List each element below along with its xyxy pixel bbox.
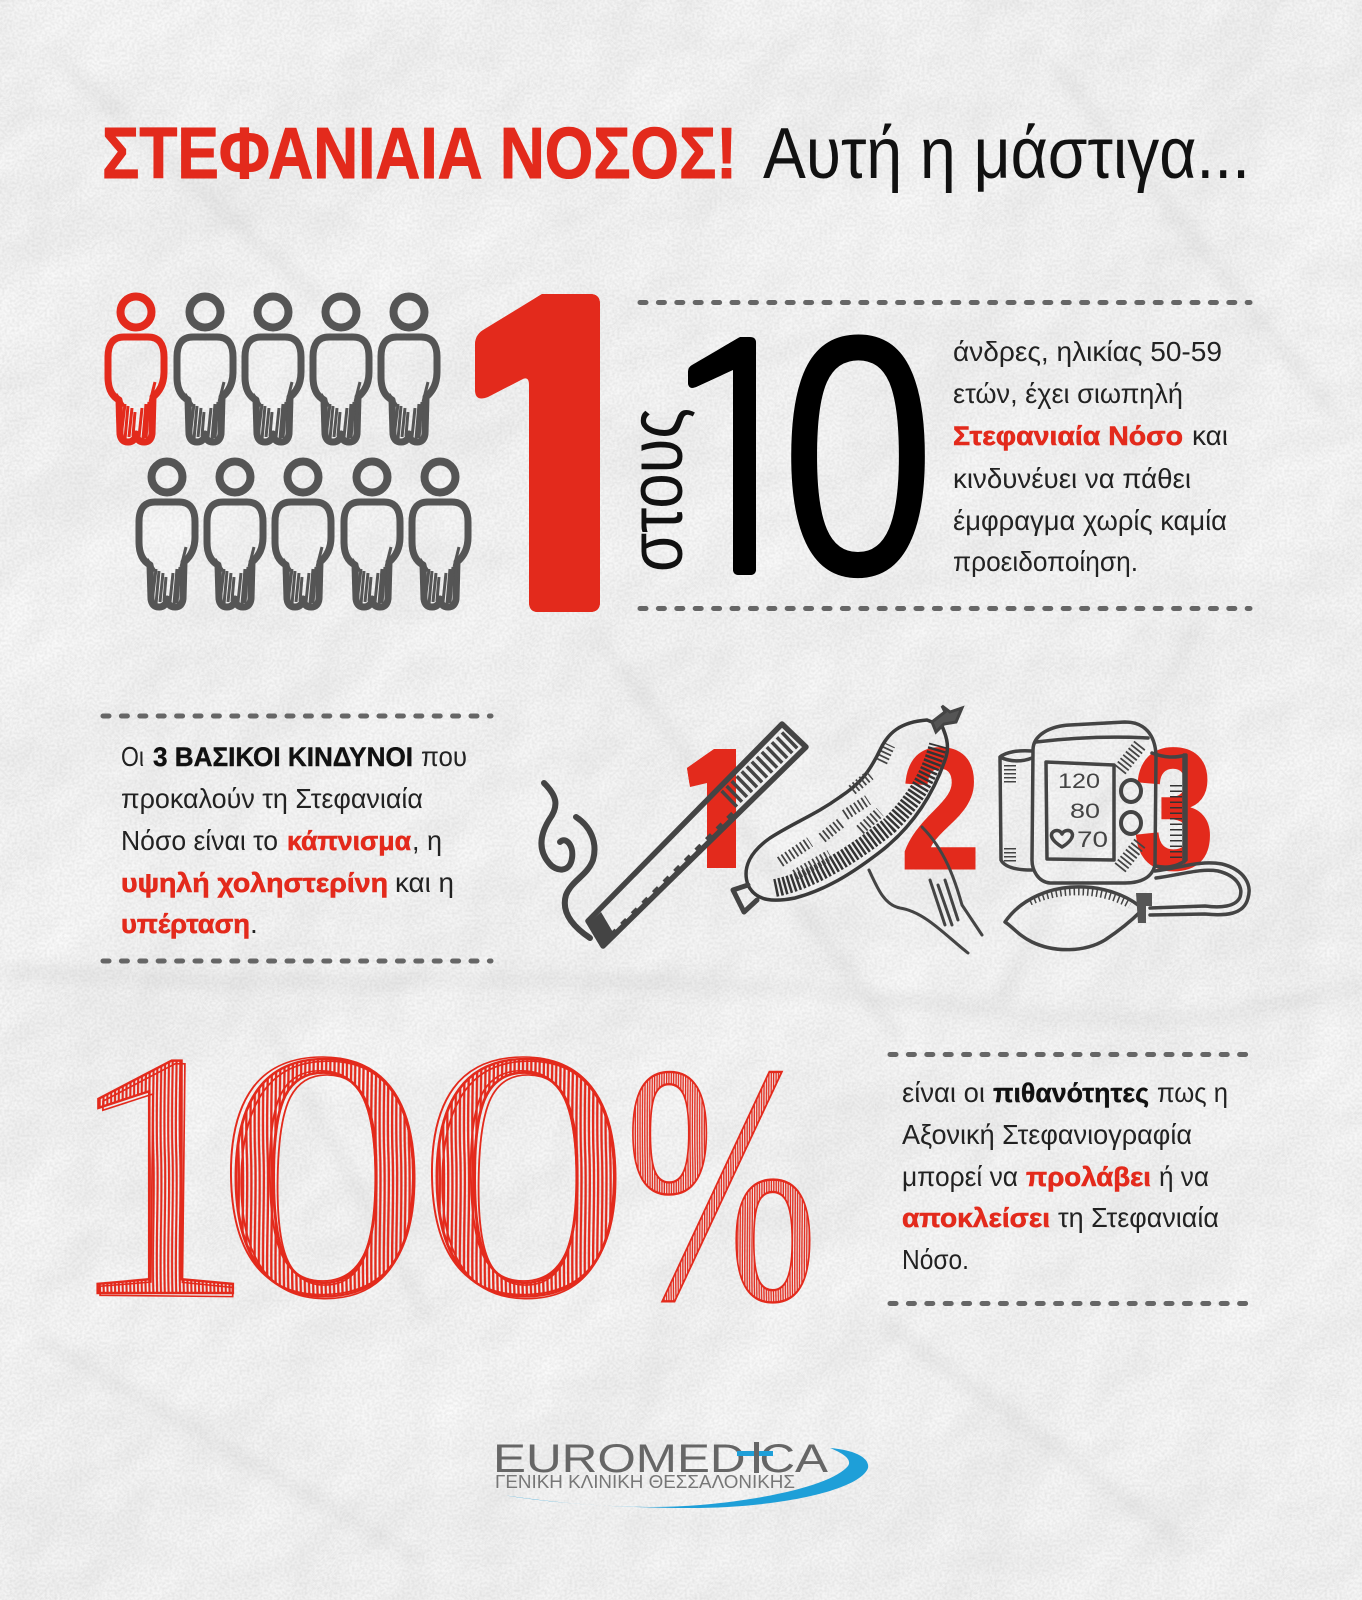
cigarette paper marks xyxy=(612,813,735,936)
risks text block: , η xyxy=(412,825,442,856)
probability text block: πως η xyxy=(1157,1077,1228,1108)
risks text block: και η xyxy=(395,867,454,898)
logo subtitle: ΓΕΝΙΚΗ ΚΛΙΝΙΚΗ ΘΕΣΣΑΛΟΝΙΚΗΣ xyxy=(495,1472,795,1492)
screen reading 80: 80 xyxy=(1070,800,1100,823)
cuff right hatch xyxy=(1170,785,1182,860)
stat description text: άνδρες, ηλικίας 50-59 xyxy=(953,336,1222,367)
logo: Euromedica xyxy=(493,1437,868,1508)
digit 0 of 10: 0 xyxy=(781,264,935,647)
probability text block xyxy=(902,1077,1228,1275)
word στους rotated: στους xyxy=(614,408,699,572)
risks text block: προκαλούν τη Στεφανιαία xyxy=(121,783,423,814)
sausage cut leaf xyxy=(869,827,982,953)
risks text block: υψηλή χοληστερίνη xyxy=(121,868,388,898)
hatch near buttons xyxy=(1120,745,1140,868)
stat description text: και xyxy=(1192,420,1228,451)
illustration: cigarette with smoke xyxy=(541,724,806,946)
risks text block: κάπνισμα xyxy=(287,826,411,856)
stat description text: Στεφανιαία Νόσο xyxy=(953,421,1183,451)
dotted rule top of probability xyxy=(890,1052,1250,1057)
digit zero first: 0 xyxy=(220,979,429,1369)
numeral 2: 2 xyxy=(901,715,980,905)
digit zero sketch line fourth: 0 xyxy=(413,977,634,1369)
digit one: 1 xyxy=(64,979,256,1369)
smoke swirl xyxy=(541,783,594,938)
logo wordmark: EUROMED CA xyxy=(493,1437,828,1481)
risks text block xyxy=(121,741,467,939)
screen xyxy=(1046,762,1114,860)
cuff left xyxy=(1000,751,1032,870)
risks text block: που xyxy=(421,741,467,772)
probability text block: πιθανότητες xyxy=(993,1078,1149,1108)
sausage shading hatch xyxy=(775,745,938,888)
probability text block: ή να xyxy=(1159,1161,1209,1192)
numeral 1: 1 xyxy=(671,714,766,905)
title red part: ΣΤΕΦΑΝΙΑΙΑ ΝΟΣΟΣ! xyxy=(102,114,737,194)
probability text block: μπορεί να xyxy=(902,1161,1018,1192)
dotted rule top of risks xyxy=(103,714,491,718)
dotted rule bottom of probability xyxy=(890,1301,1250,1306)
digit zero sketch line: 0 xyxy=(223,981,431,1373)
cigarette filter hatching xyxy=(728,738,792,800)
rubber bulb xyxy=(1005,887,1140,950)
stat description text: έμφραγμα χωρίς καμία xyxy=(953,505,1227,536)
dotted rule bottom of stat xyxy=(640,606,1250,611)
monitor top edge xyxy=(1036,737,1148,742)
risks text block: Οι xyxy=(121,741,144,772)
probability text block: τη Στεφανιαία xyxy=(1058,1202,1219,1233)
screen heart xyxy=(1051,830,1072,847)
logo cross xyxy=(737,1442,773,1473)
probability text block: Νόσο. xyxy=(902,1244,969,1275)
cigarette body xyxy=(588,724,806,946)
illustration: blood pressure monitor xyxy=(1000,722,1249,950)
digit 1 of 10: 1 xyxy=(647,264,839,649)
digit one sketch line: 1 xyxy=(66,981,259,1373)
cuff right xyxy=(1152,753,1186,867)
stat description text: ετών, έχει σιωπηλή xyxy=(953,378,1183,409)
stat description text: προειδοποίηση. xyxy=(953,546,1138,577)
probability text block: είναι οι xyxy=(902,1077,985,1108)
bulb hatch xyxy=(1030,892,1130,905)
title xyxy=(102,114,1250,194)
stat description text xyxy=(953,336,1228,577)
title black part: Αυτή η μάστιγα... xyxy=(763,114,1250,194)
large number 10 xyxy=(688,334,925,578)
monitor buttons xyxy=(1121,780,1141,834)
probability text block: Αξονική Στεφανιογραφία xyxy=(902,1119,1192,1150)
sausage texture marks xyxy=(780,745,890,875)
illustration: sausage xyxy=(733,706,982,953)
monitor body xyxy=(1032,722,1156,883)
red numerals 1 2 3 xyxy=(687,747,1210,872)
probability text block: προλάβει xyxy=(1026,1162,1151,1192)
cuff left hatch xyxy=(1004,765,1016,862)
dotted rule bottom of risks xyxy=(103,958,491,964)
risks text block: . xyxy=(250,908,258,939)
big red number 1: 1 xyxy=(430,194,687,710)
sausage tail end xyxy=(733,885,757,912)
hand-drawn 100 percent xyxy=(64,977,818,1373)
cigarette ash tip xyxy=(590,912,614,944)
percent sign: % xyxy=(625,995,818,1372)
dotted rule top of stat xyxy=(640,300,1250,305)
sausage knot top xyxy=(932,706,962,732)
probability text block: αποκλείσει xyxy=(902,1203,1050,1233)
logo swoosh xyxy=(503,1448,868,1508)
screen reading 70: 70 xyxy=(1077,827,1108,852)
risks text block: Νόσο είναι το xyxy=(121,825,278,856)
risks text block: 3 ΒΑΣΙΚΟΙ ΚΙΝΔΥΝΟΙ xyxy=(153,742,413,772)
screen reading 120: 120 xyxy=(1058,770,1100,793)
sausage body xyxy=(746,720,947,900)
digit zero sketch line second: 0 xyxy=(424,981,632,1373)
stat description text: κινδυνέυει να πάθει xyxy=(953,463,1191,494)
numeral 3: 3 xyxy=(1134,714,1214,905)
valve xyxy=(1136,893,1152,923)
hose xyxy=(1150,863,1249,915)
risks text block: υπέρταση xyxy=(121,909,250,939)
pictogram: ten people, one red xyxy=(108,296,468,607)
digit zero sketch line third: 0 xyxy=(212,977,433,1369)
digit zero second: 0 xyxy=(421,979,630,1369)
